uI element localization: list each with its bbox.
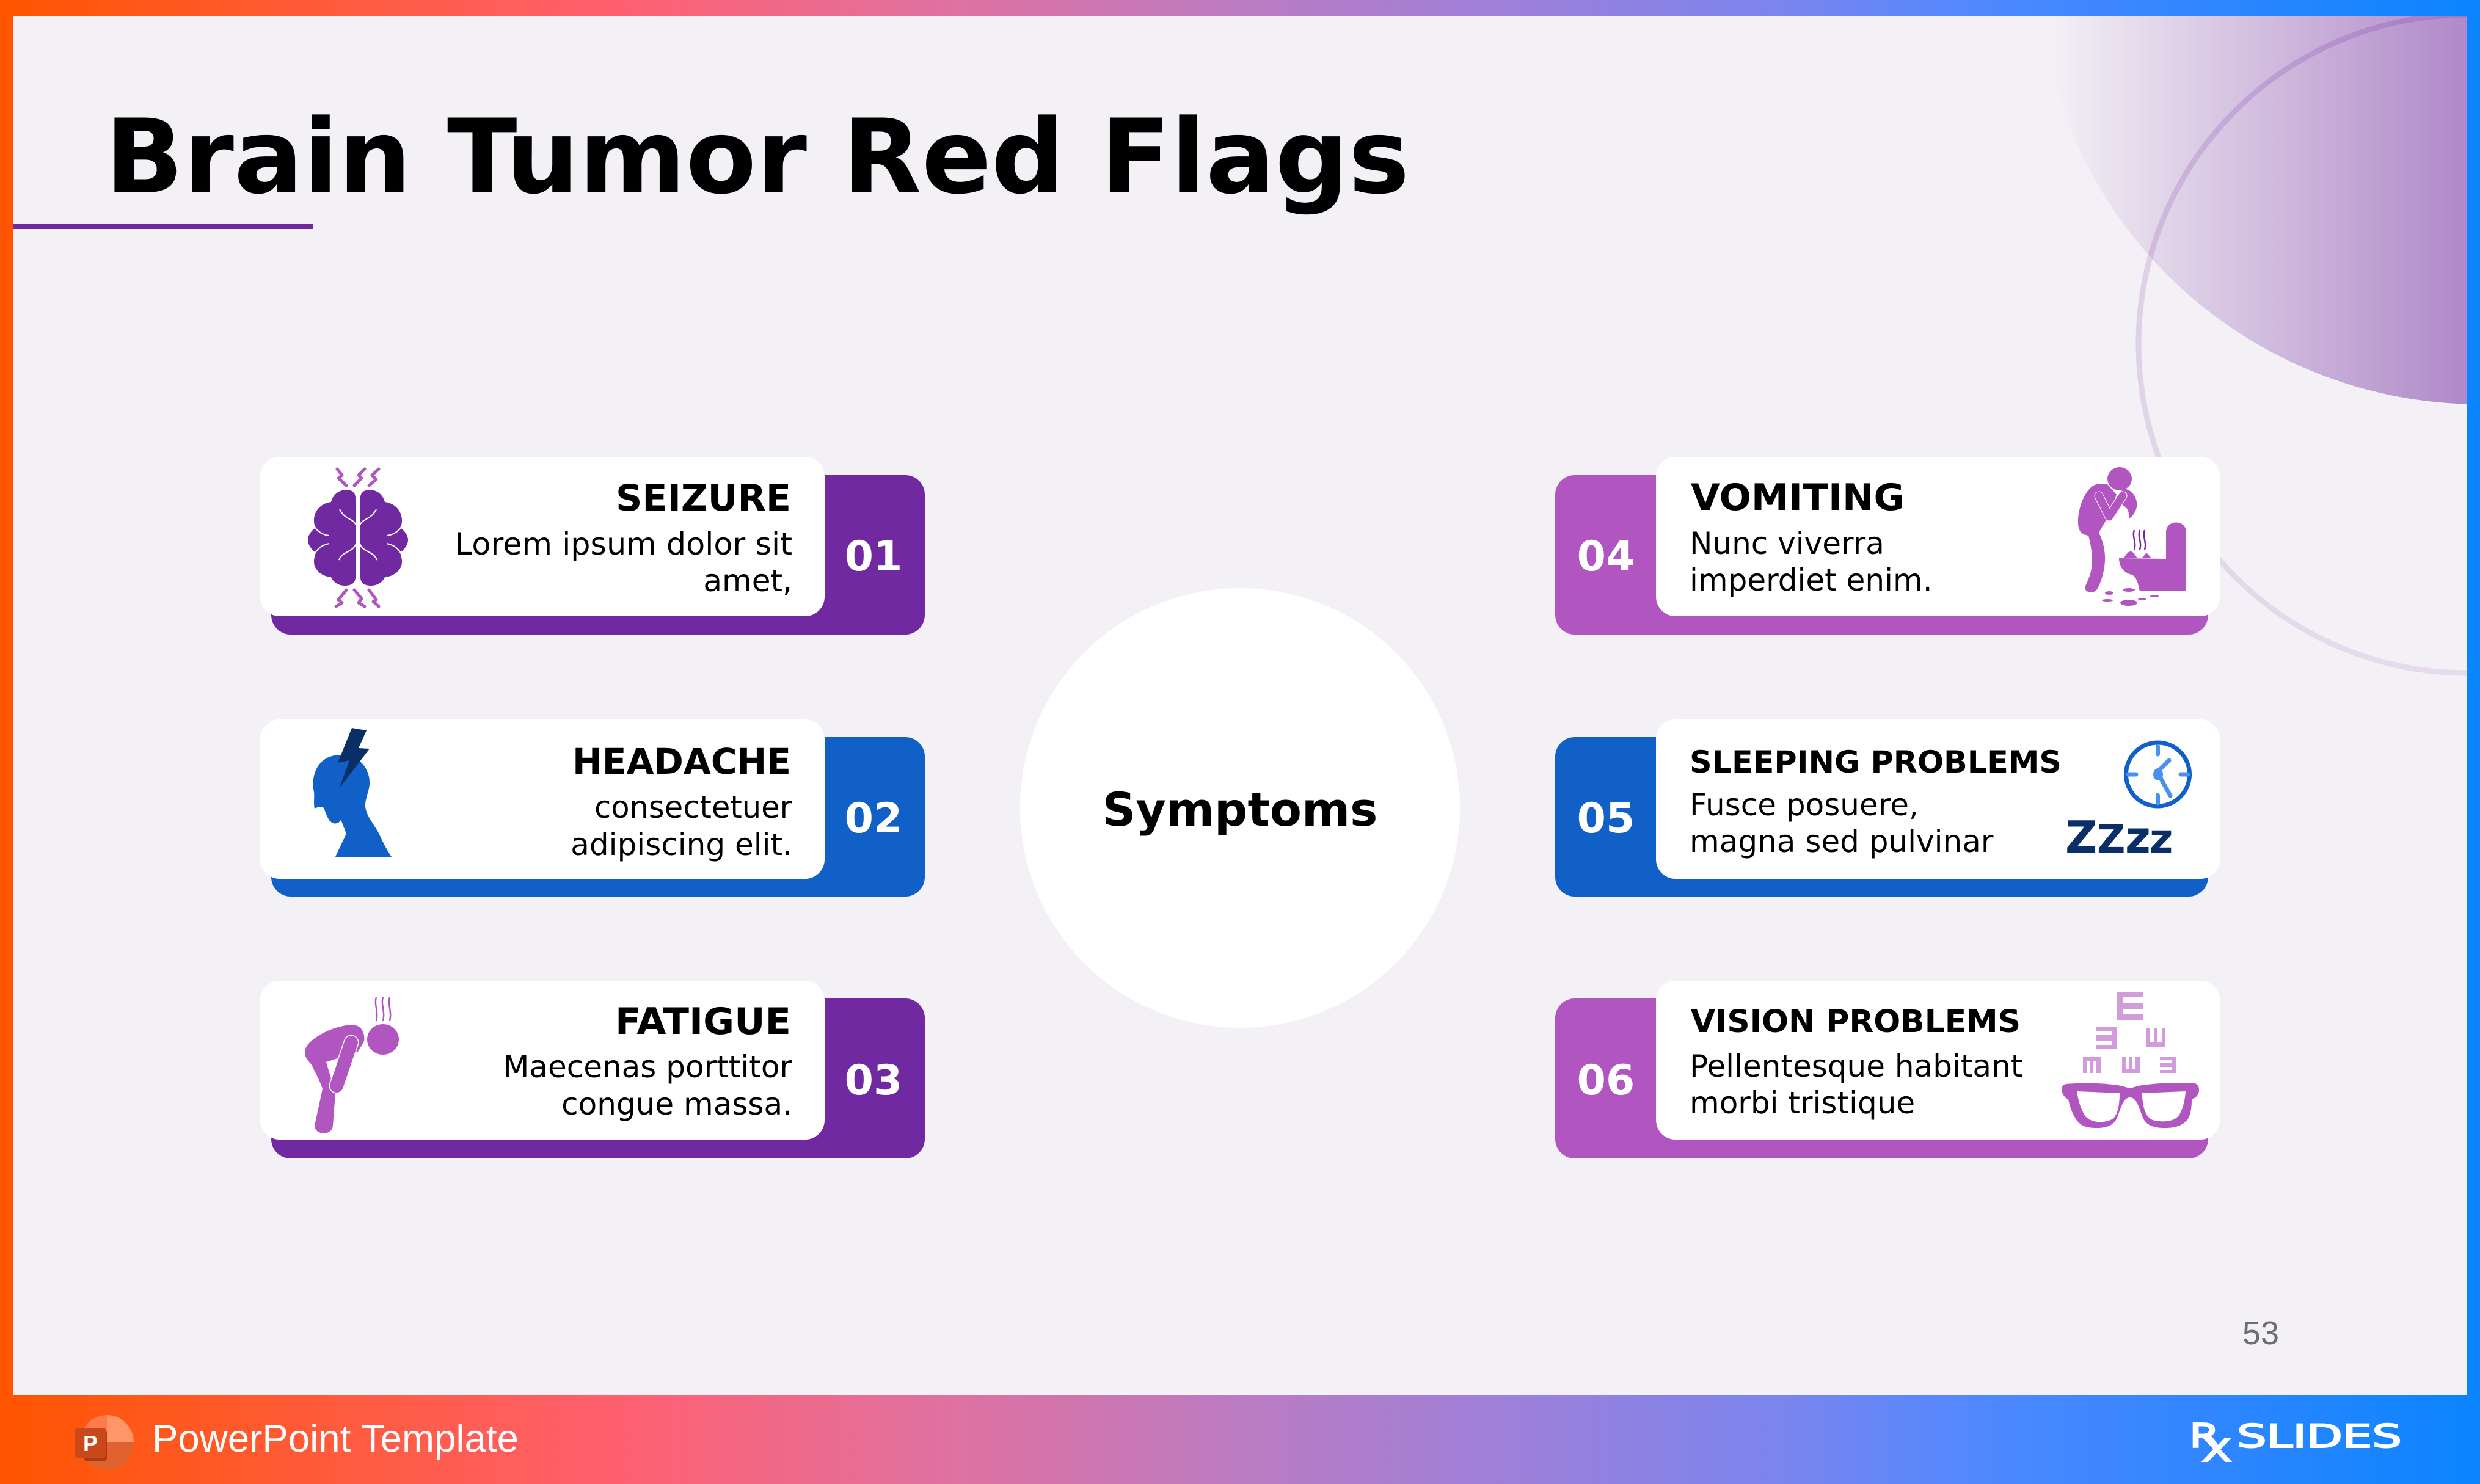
card xyxy=(260,457,825,616)
title: Brain Tumor Red Flags xyxy=(105,97,1410,217)
number tab xyxy=(271,998,925,1158)
description: Pellentesque habitant xyxy=(1690,1049,2022,1084)
number: 04 xyxy=(1577,533,1635,581)
heading: VOMITING xyxy=(1691,476,1905,519)
icon: eye chart xyxy=(2083,992,2176,1073)
description: adipiscing elit. xyxy=(571,827,792,862)
description: amet, xyxy=(703,563,792,598)
number tab xyxy=(1555,475,2208,635)
panel: 01 seizure xyxy=(260,457,925,635)
footer label: PowerPoint Template xyxy=(152,1417,519,1460)
number: 01 xyxy=(845,533,902,581)
decorative ring xyxy=(2139,15,2480,673)
description: Maecenas porttitor xyxy=(503,1049,792,1085)
page number: 53 xyxy=(2242,1315,2279,1351)
central label: Symptoms xyxy=(1103,782,1377,837)
number: 02 xyxy=(845,795,902,843)
icon: sleep letters: Z xyxy=(2065,812,2097,863)
heading: SEIZURE xyxy=(616,477,791,520)
central circle xyxy=(1020,588,1460,1028)
heading: HEADACHE xyxy=(572,741,791,782)
left frame bar xyxy=(0,0,13,1399)
icon: brain xyxy=(308,469,408,606)
heading: SLEEPING PROBLEMS xyxy=(1690,744,2062,780)
icon: clock xyxy=(2126,743,2189,806)
right frame bar xyxy=(2467,0,2480,1399)
panel: 05 sleeping problems xyxy=(1555,719,2220,897)
logo: RX Slides: X xyxy=(2201,1433,2232,1469)
description: imperdiet enim. xyxy=(1690,562,1933,598)
description: consectetuer xyxy=(594,790,792,825)
icon: glasses xyxy=(2062,1083,2199,1128)
number: 03 xyxy=(845,1057,902,1105)
number tab xyxy=(271,475,925,635)
icon: tired person xyxy=(305,997,399,1133)
bottom gradient bar xyxy=(0,1395,2480,1484)
icon: sleep letters: z xyxy=(2150,815,2173,862)
logo: RX Slides: R xyxy=(2189,1417,2220,1455)
icon: person vomiting into toilet xyxy=(2078,467,2186,606)
heading: FATIGUE xyxy=(615,1000,791,1043)
panel: 02 headache xyxy=(260,719,925,897)
number tab xyxy=(271,737,925,897)
description: magna sed pulvinar xyxy=(1690,824,1994,859)
logo: RX Slides xyxy=(2189,1417,2402,1469)
panel: 04 vomiting xyxy=(1555,457,2220,635)
description: Nunc viverra xyxy=(1690,526,1884,561)
logo: RX Slides: SLIDES xyxy=(2237,1418,2402,1455)
description: Fusce posuere, xyxy=(1690,787,1919,823)
title underline xyxy=(13,224,313,229)
number: 06 xyxy=(1577,1057,1635,1105)
icon: sleep letters: Z xyxy=(2097,817,2125,862)
card xyxy=(1656,457,2220,616)
decorative gradient circle xyxy=(2038,0,2480,404)
number tab xyxy=(1555,998,2208,1158)
icon: sleep letters: z xyxy=(2125,812,2151,863)
panel: 03 fatigue xyxy=(260,981,925,1158)
card xyxy=(1656,719,2220,879)
card xyxy=(260,719,825,879)
description: Lorem ipsum dolor sit xyxy=(455,526,792,562)
number: 05 xyxy=(1577,795,1635,843)
icon: PowerPoint logo: P xyxy=(83,1431,98,1456)
number tab xyxy=(1555,737,2208,897)
icon: PowerPoint logo xyxy=(75,1415,134,1470)
top gradient bar xyxy=(0,0,2480,16)
card xyxy=(1656,981,2220,1140)
heading: VISION PROBLEMS xyxy=(1691,1004,2021,1040)
icon: head with lightning xyxy=(313,728,392,857)
description: congue massa. xyxy=(561,1086,792,1122)
description: morbi tristique xyxy=(1690,1085,1915,1121)
panel: 06 vision problems xyxy=(1555,981,2220,1158)
icon: sleep letters xyxy=(2065,812,2173,863)
card xyxy=(260,981,825,1140)
